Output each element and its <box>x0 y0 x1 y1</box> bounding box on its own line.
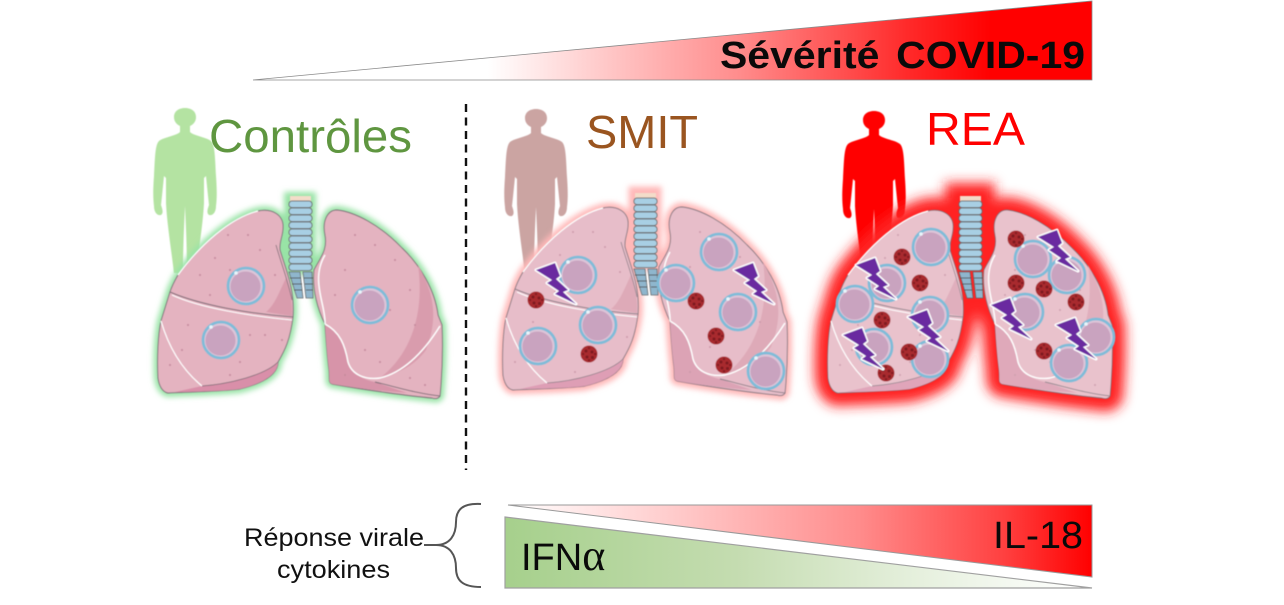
panel: SMIT <box>503 106 787 396</box>
label: Réponse virale cytokines <box>244 524 424 584</box>
panel: REA <box>828 103 1114 399</box>
lungs: REA <box>828 196 1114 399</box>
person: control silhouette <box>153 108 217 273</box>
heading: SMIT: SMIT <box>586 106 698 158</box>
brace <box>424 504 481 587</box>
panel: Contrôles <box>153 108 442 399</box>
heading: Contrôles: Contrôles <box>209 110 412 162</box>
person: SMIT silhouette <box>504 109 568 274</box>
person: REA silhouette <box>842 111 906 276</box>
heading: REA: REA <box>926 103 1025 155</box>
IL-18 label: IL-18 <box>993 515 1083 557</box>
severity gradient wedge <box>253 1 1092 80</box>
lungs: control <box>158 196 442 399</box>
IL-18 wedge <box>508 505 1092 577</box>
IFNα wedge <box>505 517 1092 588</box>
severity heading: Sévérité COVID-19 <box>720 35 1085 77</box>
lungs: SMIT <box>503 191 787 396</box>
IFNα label: IFNα <box>521 531 605 580</box>
label: Réponse virale cytokines: Réponse virale <box>244 524 424 552</box>
label: Réponse virale cytokines: cytokines <box>277 556 390 584</box>
vertical dashed divider <box>465 104 467 470</box>
